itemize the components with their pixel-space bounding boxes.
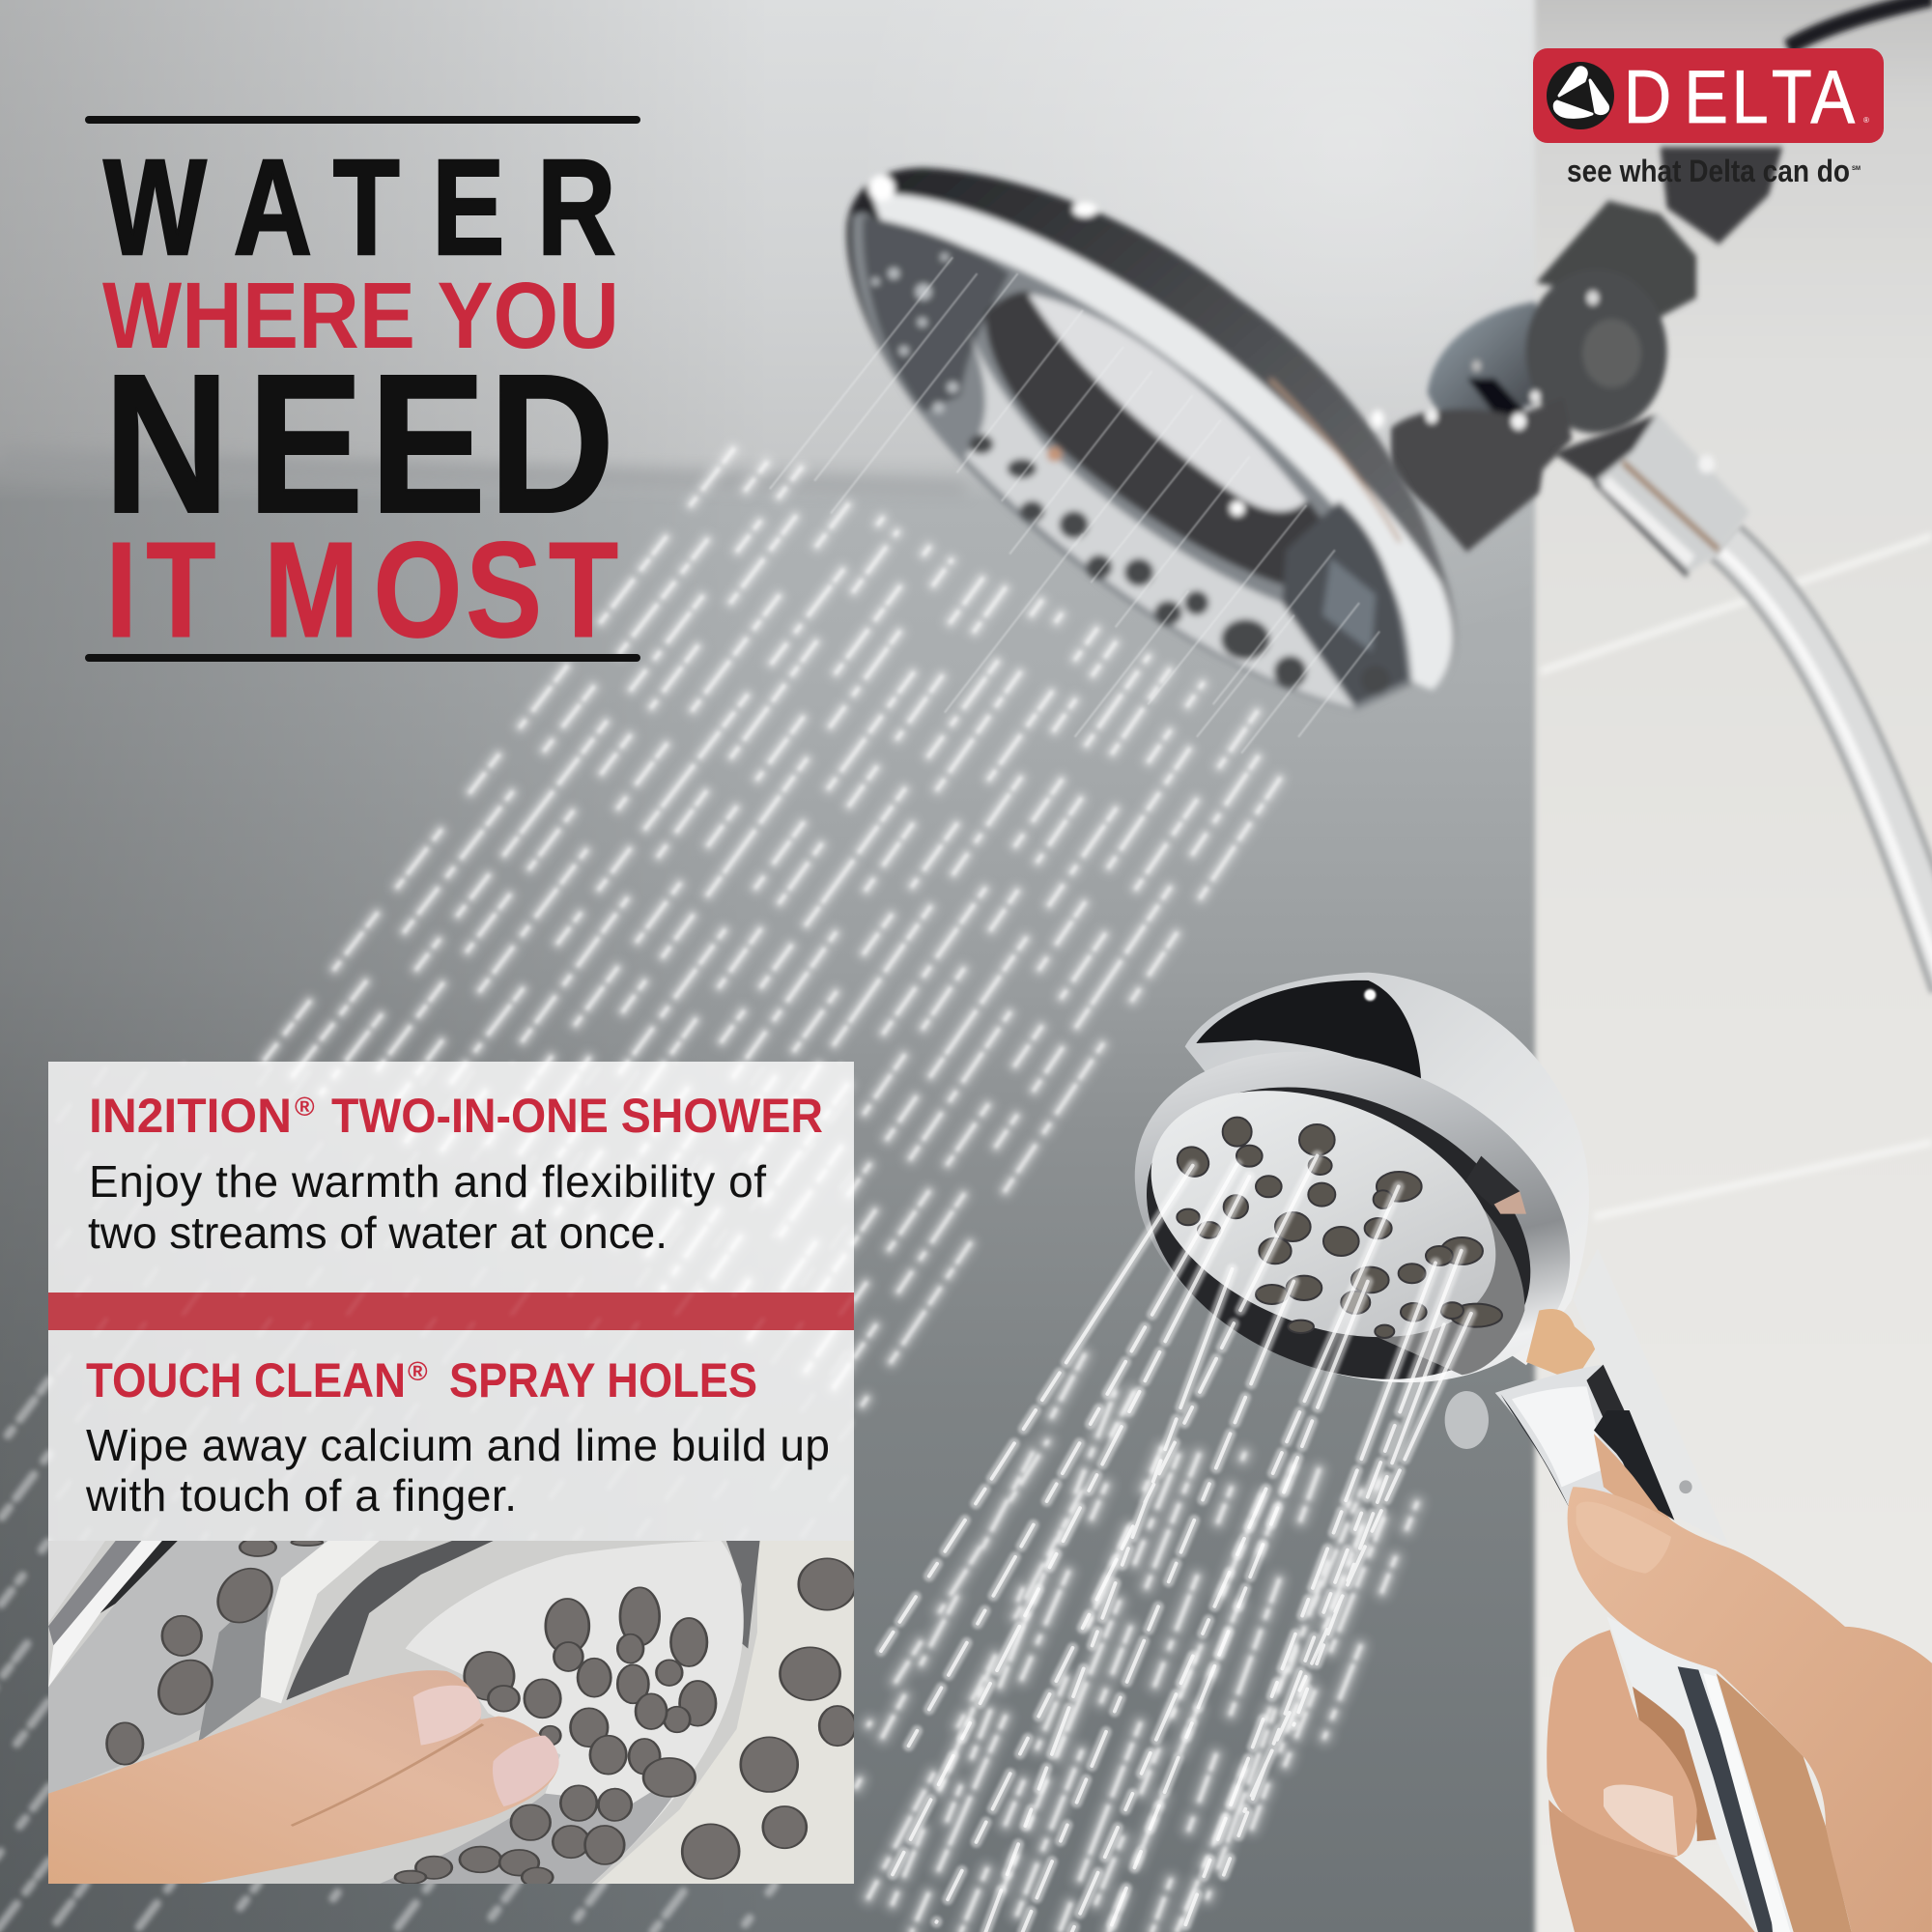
index finger bbox=[1547, 1630, 1697, 1858]
right ring bbox=[597, 1541, 854, 1884]
NEED: NEED bbox=[103, 332, 614, 554]
upper water spray bbox=[265, 450, 1306, 1405]
tagline: see what Delta can do bbox=[1567, 154, 1850, 188]
holes bbox=[107, 1538, 856, 1887]
spray plate bbox=[1115, 1043, 1532, 1384]
heading: Touch Clean bbox=[86, 1353, 757, 1407]
dark inner crescent bbox=[985, 292, 1339, 586]
heading: Touch Clean: TOUCH CLEAN bbox=[86, 1353, 406, 1407]
center disc bbox=[380, 1541, 744, 1884]
heading: In2ition: IN2ITION bbox=[89, 1089, 292, 1143]
finger behind bbox=[1633, 1687, 1717, 1841]
lower water streams bbox=[881, 1155, 1471, 1932]
wordmark: DELTA bbox=[1624, 54, 1855, 139]
body text: In2ition line 2: two streams of water at once. bbox=[88, 1208, 668, 1258]
panel background bbox=[48, 1062, 854, 1541]
dark gap bbox=[286, 1541, 494, 1700]
rule bottom bbox=[85, 654, 640, 662]
right lower dark section bbox=[1282, 501, 1408, 704]
dark underside bbox=[1103, 1033, 1575, 1434]
star highlight bbox=[1364, 989, 1376, 1001]
body text: Touch Clean line 1: Wipe away calcium and lime build up bbox=[86, 1420, 830, 1470]
fingernail bbox=[1604, 1785, 1678, 1856]
tagline: SM bbox=[1852, 166, 1861, 172]
outer left ring bbox=[48, 1541, 333, 1794]
hexagonal spray holes bbox=[969, 435, 1390, 695]
lower chrome handle bbox=[1606, 1617, 1797, 1932]
right tiled wall bbox=[1535, 0, 1932, 1932]
shower arm and swivel bbox=[1391, 0, 1932, 552]
WATER: WATER bbox=[103, 131, 615, 284]
inset photo: finger wiping spray holes bbox=[48, 1538, 856, 1887]
white inner ring and lower plate bbox=[965, 330, 1355, 708]
wide droplets of lower spray bbox=[856, 1355, 1417, 1932]
title: Water where you need it most bbox=[85, 116, 640, 666]
dark mottled cluster bbox=[863, 216, 1009, 412]
heading: In2ition bbox=[89, 1089, 823, 1143]
spray face bbox=[852, 213, 1412, 711]
logo: Delta: ® bbox=[1863, 116, 1869, 125]
red divider band bbox=[48, 1293, 854, 1330]
heading: In2ition: TWO-IN-ONE SHOWER bbox=[331, 1089, 823, 1143]
back shell bbox=[847, 168, 1456, 711]
dark reflection bbox=[1196, 980, 1422, 1089]
rule top bbox=[85, 116, 640, 124]
panel: feature callouts bbox=[48, 1062, 854, 1541]
fingernails bbox=[413, 1686, 481, 1746]
highlights bbox=[868, 175, 895, 201]
body text: In2ition line 1: Enjoy the warmth and flexibility of bbox=[89, 1156, 766, 1207]
chrome rim band bbox=[871, 194, 1453, 691]
ring reflection bbox=[1465, 1156, 1520, 1210]
hose bbox=[1721, 542, 1932, 989]
fingers bbox=[48, 1670, 558, 1884]
logo: Delta bbox=[1533, 48, 1884, 143]
IT MOST: IT MOST bbox=[105, 513, 618, 666]
see-through opening bbox=[1028, 294, 1306, 511]
body text: Touch Clean line 2: with touch of a finger. bbox=[85, 1470, 517, 1520]
heading: Touch Clean: SPRAY HOLES bbox=[449, 1353, 757, 1407]
finger behind handle bbox=[1594, 1434, 1671, 1520]
skin reflection bbox=[1526, 1309, 1597, 1381]
dome bbox=[1185, 973, 1589, 1365]
thumb and palm bbox=[1568, 1487, 1932, 1932]
lower hand shower head bbox=[1087, 973, 1618, 1449]
ring finger bbox=[1548, 1800, 1755, 1932]
handle, translucent upper part bbox=[1495, 1248, 1728, 1544]
chrome ring bbox=[1087, 992, 1618, 1442]
spray holes bbox=[1172, 1118, 1502, 1338]
palm behind handle bbox=[1717, 1673, 1852, 1932]
upper shower head bbox=[847, 168, 1456, 711]
WHERE YOU: WHERE YOU bbox=[102, 263, 619, 368]
button tab bbox=[1445, 1391, 1489, 1449]
hand holding shower bbox=[1547, 1410, 1932, 1932]
heading: In2ition: ® bbox=[295, 1092, 315, 1122]
falling water behind panel and along edges bbox=[0, 1380, 777, 1932]
hose holder bbox=[1553, 412, 1749, 575]
water strands from upper head bbox=[770, 257, 1379, 753]
icon: Delta triangle emblem bbox=[1547, 62, 1614, 129]
thumbnail bbox=[1577, 1502, 1671, 1574]
heading: Touch Clean: ® bbox=[408, 1356, 428, 1386]
